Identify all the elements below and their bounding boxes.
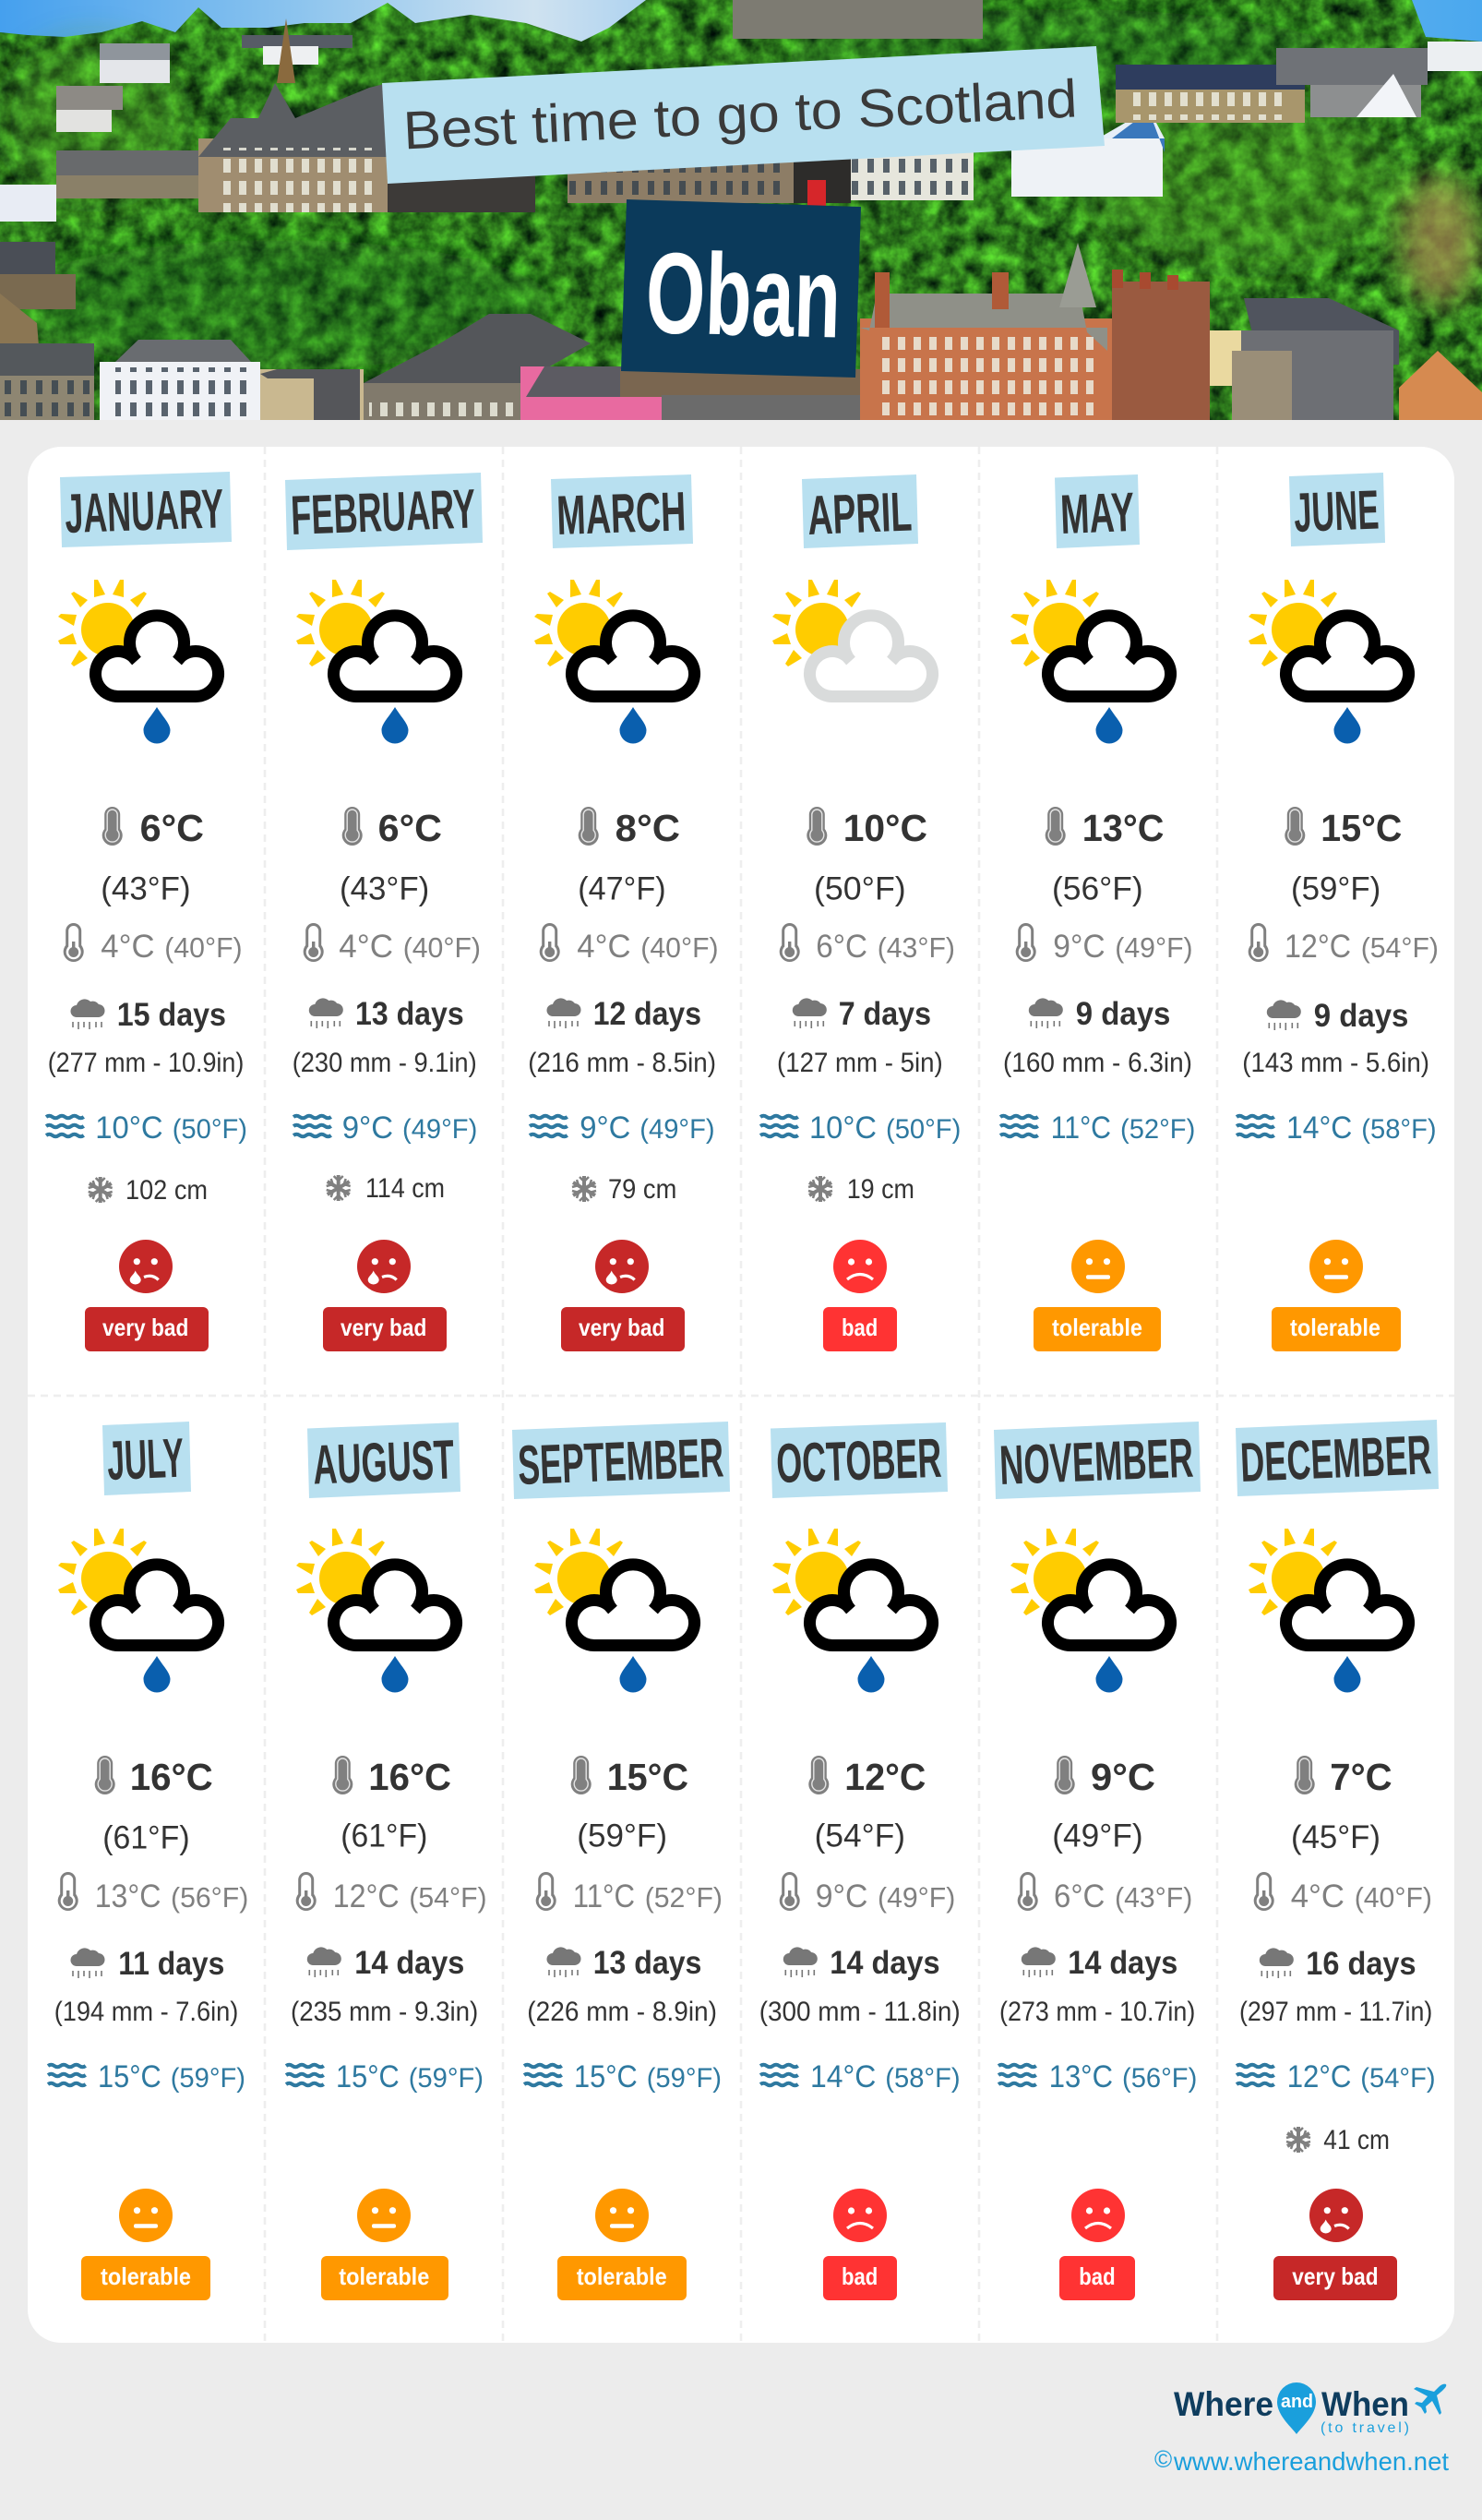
rain days: 15 days — [117, 997, 226, 1033]
rainfall: (277 mm - 10.9in) — [48, 1048, 244, 1078]
rain days — [1267, 998, 1408, 1034]
low temperature — [536, 1872, 723, 1914]
icon: sun and grey cloud — [772, 580, 933, 697]
high temperature: 8°C — [616, 807, 680, 849]
high temperature — [1046, 807, 1164, 849]
month column: February — [285, 473, 483, 1351]
sea temperature: (50°F) — [886, 1114, 961, 1145]
low temperature: (43°F) — [878, 931, 955, 964]
high temperature fahrenheit: (59°F) — [577, 1818, 667, 1854]
icon: very bad face — [595, 1240, 649, 1293]
icon: tolerable face — [1071, 1240, 1125, 1293]
sea temperature: (52°F) — [1120, 1114, 1195, 1145]
month column: April — [760, 474, 961, 1351]
sea temperature: 12°C — [1287, 2059, 1351, 2094]
high temperature — [95, 1756, 213, 1798]
low temperature: 9°C — [816, 1878, 867, 1914]
rain days: 14 days — [830, 1945, 940, 1981]
low temperature: (54°F) — [1361, 931, 1439, 964]
sea temperature: 14°C — [1286, 1110, 1352, 1146]
city label: Oban — [621, 199, 861, 378]
month label — [102, 1422, 191, 1495]
low temperature: 4°C — [339, 929, 393, 965]
icon: very bad face — [119, 1240, 173, 1293]
icon: very bad face — [1309, 2189, 1363, 2242]
high temperature fahrenheit: (47°F) — [578, 871, 666, 906]
rain days: 13 days — [593, 1945, 701, 1981]
month column: January — [46, 472, 247, 1351]
high temperature fahrenheit: (50°F) — [814, 871, 906, 906]
high temperature — [579, 807, 680, 849]
month label — [994, 1422, 1201, 1499]
snowfall: 79 cm — [608, 1174, 676, 1205]
rainfall: (235 mm - 9.3in) — [291, 1997, 478, 2027]
sea temperature — [530, 1110, 715, 1146]
month column: March — [528, 474, 719, 1351]
rainfall: (300 mm - 11.8in) — [759, 1997, 961, 2027]
website credit: www.whereandwhen.net — [1173, 2447, 1449, 2476]
snowfall: 41 cm — [1323, 2125, 1390, 2155]
sea temperature — [998, 2059, 1197, 2094]
month label — [285, 473, 483, 550]
low temperature — [540, 923, 719, 965]
low temperature: 4°C — [1291, 1878, 1345, 1914]
sea temperature: 14°C — [810, 2059, 876, 2094]
sea temperature: (58°F) — [885, 2063, 961, 2094]
high temperature — [1285, 807, 1402, 849]
rain days: 14 days — [1068, 1945, 1177, 1981]
low temperature: (49°F) — [1115, 931, 1193, 964]
low temperature: (43°F) — [1115, 1881, 1192, 1914]
high temperature: 16°C — [130, 1756, 213, 1798]
rainfall: (127 mm - 5in) — [777, 1048, 943, 1078]
low temperature: (40°F) — [640, 931, 719, 964]
low temperature — [304, 923, 481, 965]
rain days: 9 days — [1314, 998, 1408, 1034]
month column: July — [48, 1422, 248, 2300]
icon: tolerable face — [119, 2189, 173, 2242]
icon: map pin — [1277, 2382, 1316, 2434]
snowfall: 19 cm — [847, 1174, 914, 1205]
month column: May — [1000, 474, 1195, 1351]
high temperature: 6°C — [140, 807, 204, 849]
low temperature: (40°F) — [403, 931, 481, 964]
rainfall: (226 mm - 8.9in) — [527, 1997, 717, 2027]
snowfall — [1286, 2125, 1390, 2155]
rating badge: very bad — [1292, 2262, 1379, 2290]
month label: OCTOBER — [775, 1427, 942, 1494]
sea temperature: (49°F) — [639, 1114, 715, 1145]
high temperature: 15°C — [607, 1756, 688, 1798]
white months card — [28, 447, 1454, 2343]
sea temperature — [286, 2059, 484, 2094]
rain days — [70, 1946, 224, 1982]
low temperature — [780, 1872, 955, 1914]
month label: SEPTEMBER — [517, 1426, 724, 1496]
icon: bad face — [833, 1240, 887, 1293]
icon: sun, cloud and rain — [296, 1529, 457, 1693]
snowfall — [572, 1174, 676, 1205]
month label — [551, 474, 693, 548]
high temperature fahrenheit: (45°F) — [1291, 1819, 1380, 1855]
month column: December — [1236, 1420, 1439, 2300]
month label: JULY — [106, 1427, 185, 1492]
low temperature — [296, 1872, 487, 1914]
icon: plane — [1414, 2384, 1446, 2415]
logo: Where and When: When — [1321, 2385, 1409, 2423]
rating badge: tolerable — [1290, 1314, 1380, 1341]
icon: tolerable face — [357, 2189, 411, 2242]
rain days: 16 days — [1306, 1946, 1416, 1982]
icon: bad face — [1071, 2189, 1125, 2242]
rating badge: bad — [842, 1314, 878, 1341]
rating badge — [81, 2256, 210, 2300]
rain days — [1022, 1945, 1177, 1981]
rain days: 9 days — [1076, 996, 1170, 1032]
month label: MARCH — [556, 480, 687, 546]
high temperature: 6°C — [378, 807, 442, 849]
month label — [1055, 474, 1140, 548]
high temperature fahrenheit: (59°F) — [1291, 871, 1380, 906]
high temperature fahrenheit: (61°F) — [341, 1818, 427, 1854]
low temperature: (56°F) — [171, 1881, 248, 1914]
icon: sun, cloud and rain — [772, 1529, 933, 1693]
city label: Oban: Oban — [644, 229, 843, 363]
icon: bad face — [833, 2189, 887, 2242]
rain days: 11 days — [118, 1946, 224, 1982]
rain days — [309, 996, 464, 1032]
rainfall: (216 mm - 8.5in) — [528, 1048, 716, 1078]
rating badge — [823, 1307, 897, 1351]
title banner — [382, 46, 1105, 184]
low temperature: 6°C — [816, 929, 867, 965]
logo: Where and When: (to travel) — [1321, 2420, 1409, 2436]
rain days — [546, 996, 701, 1032]
rating badge — [561, 1307, 685, 1351]
rain days: 13 days — [355, 996, 464, 1032]
high temperature fahrenheit: (61°F) — [102, 1820, 190, 1855]
website credit: © — [1154, 2445, 1172, 2473]
rating badge: tolerable — [577, 2262, 667, 2290]
sea temperature: 10°C — [95, 1110, 163, 1146]
rainfall: (194 mm - 7.6in) — [54, 1997, 238, 2027]
rain days — [1260, 1946, 1416, 1982]
rating badge: very bad — [579, 1314, 664, 1341]
low temperature: 12°C — [333, 1878, 400, 1914]
month label — [1289, 473, 1385, 546]
icon: sun, cloud and rain — [1010, 1529, 1171, 1693]
rating badge — [823, 2256, 897, 2300]
sea temperature — [46, 1110, 247, 1146]
rain days: 7 days — [839, 996, 931, 1032]
month label: AUGUST — [312, 1428, 455, 1495]
rain days — [307, 1945, 464, 1981]
rating badge — [1059, 2256, 1135, 2300]
month label — [60, 472, 232, 547]
hero photo: Oban harbour hillside — [0, 0, 1482, 420]
icon: sun, cloud and rain — [534, 1529, 695, 1693]
rain days — [70, 997, 226, 1033]
low temperature: (40°F) — [1355, 1881, 1432, 1914]
high temperature — [1295, 1756, 1392, 1798]
sea temperature: 15°C — [574, 2059, 638, 2094]
low temperature — [1249, 923, 1439, 965]
sea temperature: (59°F) — [171, 2063, 245, 2094]
icon: sun, cloud and rain — [296, 580, 457, 744]
rain days — [783, 1945, 940, 1981]
high temperature fahrenheit: (43°F) — [340, 871, 429, 906]
icon: tolerable face — [1309, 1240, 1363, 1293]
low temperature: 12°C — [1285, 929, 1351, 965]
high temperature — [332, 1756, 451, 1798]
icon: sun, cloud and rain — [1249, 580, 1409, 744]
icon: very bad face — [357, 1240, 411, 1293]
high temperature: 15°C — [1321, 807, 1402, 849]
rating badge: very bad — [102, 1314, 188, 1341]
low temperature: (40°F) — [164, 931, 243, 964]
low temperature: 4°C — [577, 929, 631, 965]
high temperature: 16°C — [368, 1756, 451, 1798]
snowfall: 114 cm — [365, 1173, 445, 1204]
sea temperature: 15°C — [98, 2059, 161, 2094]
sea temperature: (59°F) — [647, 2063, 722, 2094]
month column: October — [759, 1422, 961, 2300]
sea temperature — [760, 1110, 961, 1146]
high temperature: 7°C — [1330, 1756, 1392, 1798]
month label — [802, 474, 918, 548]
snowfall — [327, 1173, 445, 1204]
rain days: 12 days — [593, 996, 701, 1032]
icon: sun, cloud and rain — [534, 580, 695, 744]
low temperature: 9°C — [1053, 929, 1106, 965]
rainfall: (230 mm - 9.1in) — [293, 1048, 477, 1078]
high temperature — [807, 807, 927, 849]
high temperature — [1055, 1756, 1155, 1798]
month label: FEBRUARY — [290, 477, 476, 546]
icon: sun, cloud and rain — [58, 580, 219, 744]
low temperature: 4°C — [101, 929, 155, 965]
sea temperature — [760, 2059, 961, 2094]
sea temperature: (54°F) — [1360, 2063, 1436, 2094]
high temperature: 9°C — [1091, 1756, 1155, 1798]
rating badge — [1272, 1307, 1401, 1351]
high temperature — [102, 807, 204, 849]
rainfall: (143 mm - 5.6in) — [1242, 1048, 1429, 1078]
rating badge — [323, 1307, 447, 1351]
sea temperature — [1000, 1110, 1195, 1146]
sea temperature: 10°C — [809, 1110, 877, 1146]
high temperature fahrenheit: (43°F) — [101, 871, 191, 906]
low temperature: (52°F) — [645, 1881, 723, 1914]
rain days — [1029, 996, 1170, 1032]
sea temperature: (50°F) — [173, 1114, 247, 1145]
low temperature: 11°C — [573, 1878, 635, 1914]
rating badge: very bad — [341, 1314, 426, 1341]
month column: September — [512, 1422, 730, 2300]
month label: JANUARY — [64, 477, 224, 545]
high temperature: 12°C — [844, 1756, 926, 1798]
high temperature — [808, 1756, 926, 1798]
icon: sun, cloud and rain — [58, 1529, 219, 1693]
logo: Where and When — [1174, 2382, 1446, 2436]
sea temperature: 9°C — [342, 1110, 393, 1146]
month label — [512, 1422, 730, 1499]
rating badge: tolerable — [339, 2262, 429, 2290]
low temperature: (54°F) — [409, 1881, 487, 1914]
rain days: 14 days — [354, 1945, 464, 1981]
low temperature: (49°F) — [878, 1881, 955, 1914]
rain days — [546, 1945, 701, 1981]
high temperature — [571, 1756, 688, 1798]
rainfall: (297 mm - 11.7in) — [1239, 1997, 1432, 2027]
snowfall — [808, 1174, 914, 1205]
high temperature fahrenheit: (54°F) — [815, 1818, 905, 1854]
month label: APRIL — [807, 481, 913, 546]
sea temperature: (49°F) — [402, 1114, 477, 1145]
month label: JUNE — [1293, 479, 1380, 544]
sea temperature: 9°C — [580, 1110, 630, 1146]
low temperature — [58, 1872, 248, 1914]
low temperature — [64, 923, 243, 965]
icon: tolerable face — [595, 2189, 649, 2242]
high temperature: 13°C — [1082, 807, 1164, 849]
month label: MAY — [1059, 481, 1135, 546]
rainfall: (160 mm - 6.3in) — [1003, 1048, 1192, 1078]
high temperature fahrenheit: (56°F) — [1052, 871, 1143, 906]
sea temperature: 15°C — [336, 2059, 400, 2094]
sea temperature — [293, 1110, 477, 1146]
low temperature — [1018, 1872, 1192, 1914]
rating badge: tolerable — [101, 2262, 191, 2290]
sea temperature: (59°F) — [409, 2063, 484, 2094]
month label — [771, 1422, 948, 1498]
low temperature — [1254, 1872, 1432, 1914]
low temperature — [780, 923, 955, 965]
rating badge: tolerable — [1052, 1314, 1142, 1341]
rating badge: bad — [1079, 2262, 1116, 2290]
month label — [307, 1422, 460, 1498]
logo: Where and When: and — [1281, 2392, 1313, 2412]
high temperature fahrenheit: (49°F) — [1052, 1818, 1143, 1854]
sea temperature — [48, 2059, 245, 2094]
rating badge — [1273, 2256, 1397, 2300]
logo: Where and When: Where — [1174, 2385, 1273, 2423]
sea temperature — [1237, 2059, 1436, 2094]
rating badge — [557, 2256, 687, 2300]
icon: sun, cloud and rain — [1010, 580, 1171, 744]
month label: NOVEMBER — [998, 1427, 1194, 1496]
rain days — [793, 996, 931, 1032]
month column: November — [994, 1422, 1201, 2300]
sea temperature: (58°F) — [1361, 1114, 1437, 1145]
rating badge — [321, 2256, 448, 2300]
rating badge: bad — [842, 2262, 878, 2290]
rating badge — [85, 1307, 209, 1351]
month column: August — [286, 1422, 487, 2300]
rainfall: (273 mm - 10.7in) — [999, 1997, 1195, 2027]
sea temperature — [1237, 1110, 1437, 1146]
sea temperature — [524, 2059, 722, 2094]
title text: Best time to go to Scotland — [402, 68, 1079, 161]
high temperature: 10°C — [843, 807, 927, 849]
low temperature — [1016, 923, 1193, 965]
sea temperature: 11°C — [1051, 1110, 1111, 1146]
rating badge — [1034, 1307, 1161, 1351]
snowfall — [89, 1175, 208, 1206]
low temperature: 13°C — [95, 1878, 161, 1914]
low temperature: 6°C — [1054, 1878, 1105, 1914]
sea temperature: 13°C — [1049, 2059, 1113, 2094]
month column: June — [1237, 473, 1439, 1351]
snowfall: 102 cm — [125, 1175, 208, 1206]
icon: sun, cloud and rain — [1249, 1529, 1409, 1693]
sea temperature: (56°F) — [1122, 2063, 1197, 2094]
high temperature — [342, 807, 442, 849]
